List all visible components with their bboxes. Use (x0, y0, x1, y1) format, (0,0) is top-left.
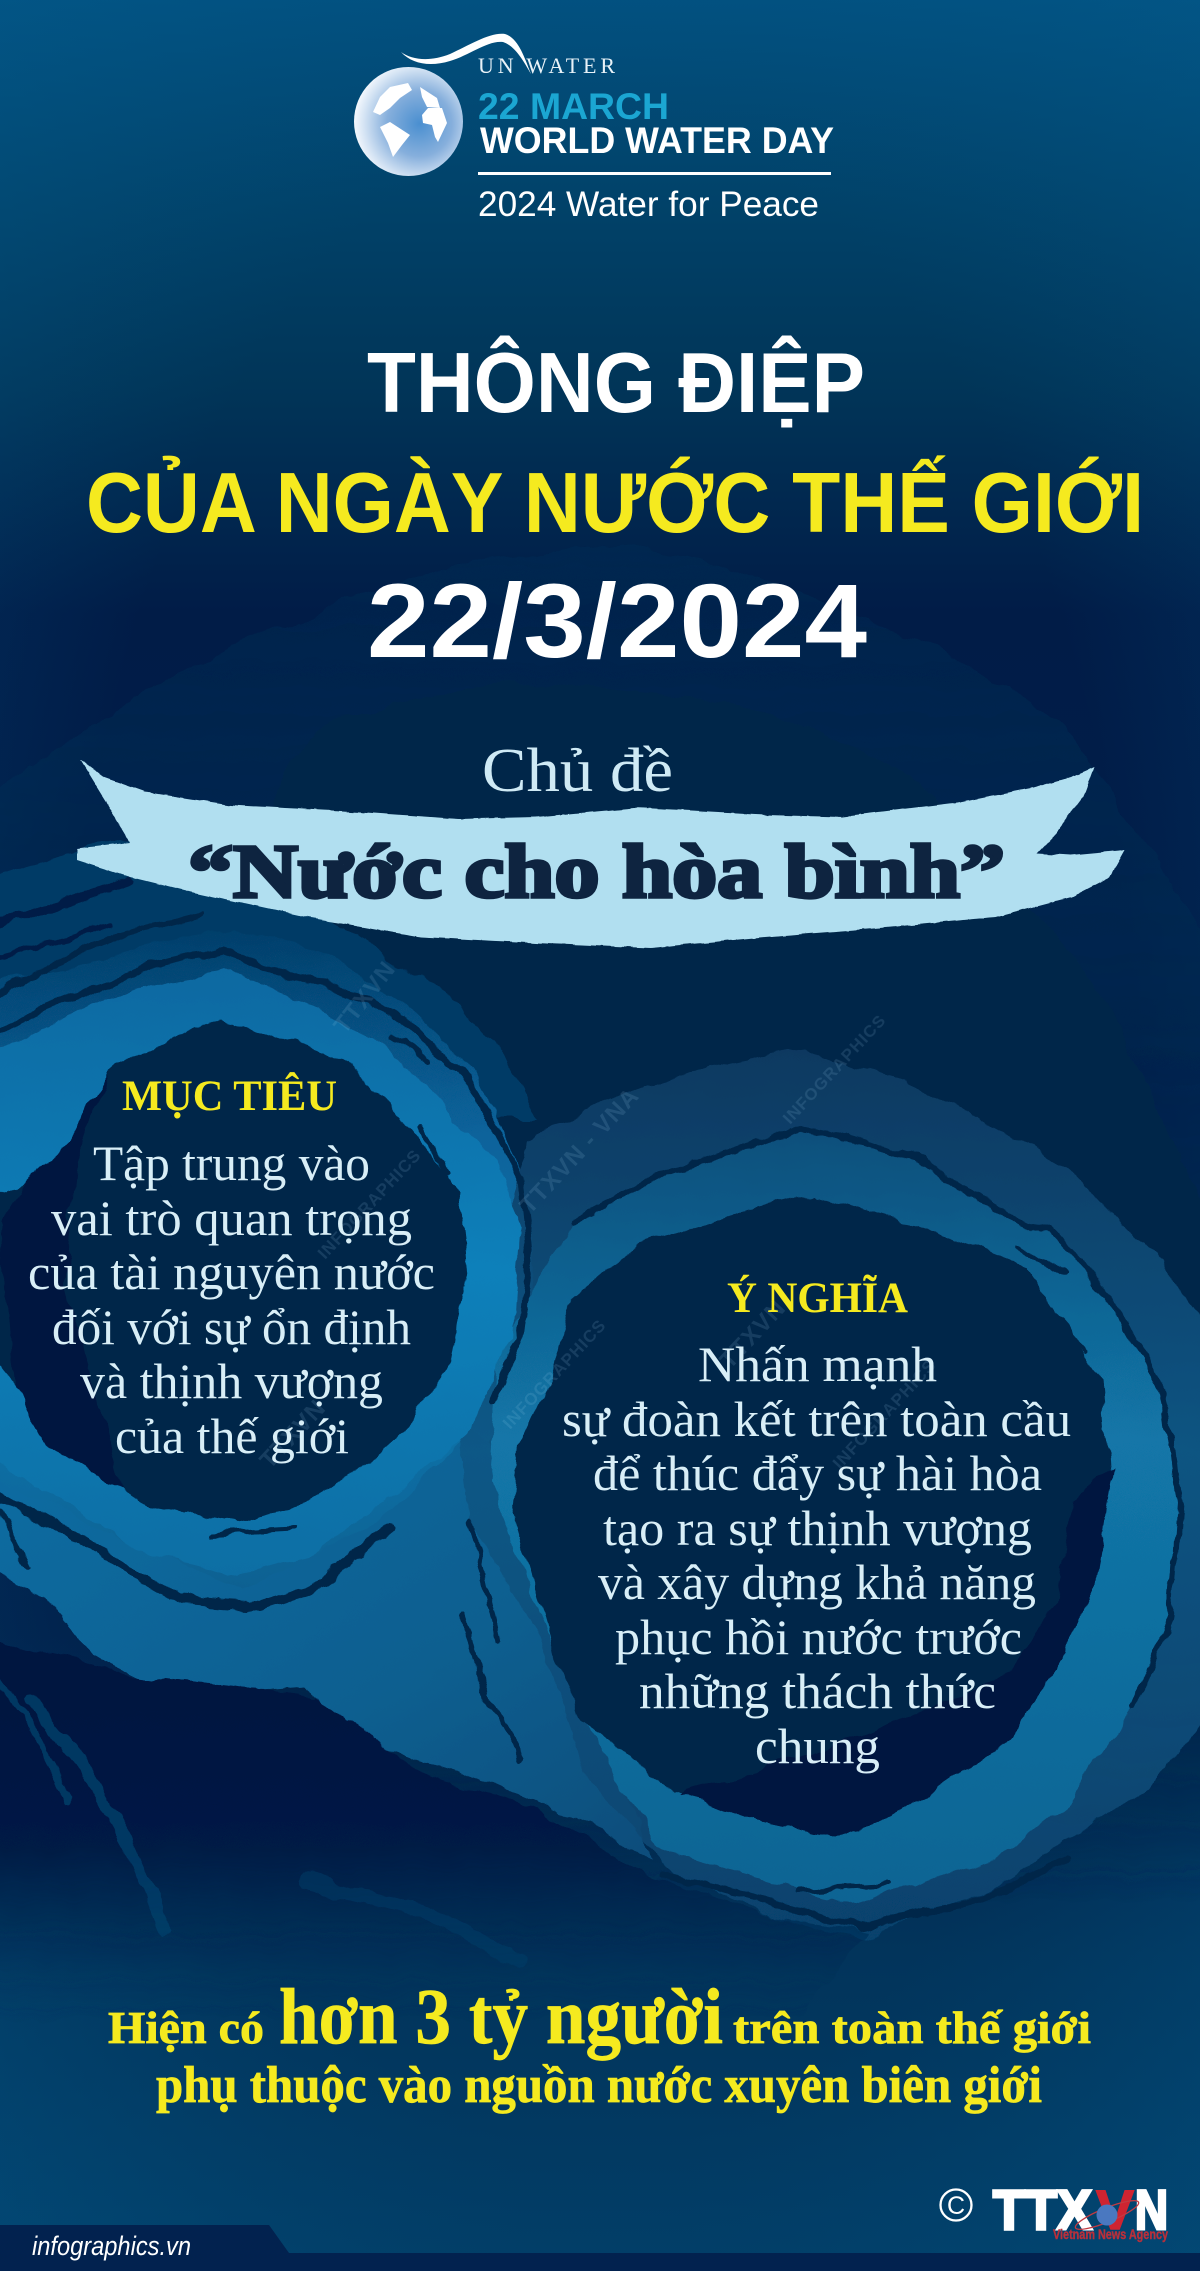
logo: TTXVN: Vietnam News Agency (1053, 2226, 1168, 2242)
title (86, 335, 1144, 680)
goal text: của thế giới (115, 1408, 349, 1464)
lower left ribbon (0, 1430, 650, 1860)
watermarks: TTXVN (715, 1294, 791, 1374)
callout: 3 billion people: Hiện có (108, 2002, 264, 2053)
right ring inner dark blob (513, 1195, 1110, 1838)
callout: 3 billion people: trên toàn thế giới (733, 2002, 1091, 2053)
footer band (0, 2225, 1200, 2271)
watermarks: TTXVN (328, 956, 401, 1039)
icon: copyright: C (947, 2192, 965, 2220)
panel: meaning (562, 1275, 1071, 1774)
meaning text: chung (755, 1718, 880, 1774)
right ring inner band (490, 1128, 1179, 1905)
logo: TTXVN: N (1135, 2178, 1168, 2241)
left ring inner band (0, 969, 520, 1575)
watermarks: INFOGRAPHICS (829, 1356, 940, 1473)
callout: 3 billion people: hơn 3 tỷ người (279, 1974, 723, 2061)
right blob darker crescent (681, 1467, 1113, 1838)
World Water Day: WORLD WATER DAY (480, 120, 834, 161)
logo: TTXVN: V (1096, 2178, 1134, 2241)
meaning text: tạo ra sự thịnh vượng (603, 1500, 1032, 1556)
callout: 3 billion people: phụ thuộc vào nguồn nước xuyên biên giới (156, 2057, 1042, 2114)
lower left teal stripes (0, 1670, 520, 1960)
deep shadow lower left (0, 1636, 865, 2020)
goal text (28, 1135, 435, 1464)
left ring inner dark blob (0, 1018, 467, 1522)
icon: copyright (940, 2190, 972, 2220)
logo: TTXVN: TTX (993, 2178, 1092, 2241)
meaning text: và xây dựng khả năng (598, 1554, 1036, 1610)
watermarks (255, 956, 940, 1474)
left blob darker crescent (0, 1074, 122, 1490)
meaning text: những thách thức (639, 1663, 996, 1719)
banner: theme (77, 760, 1125, 948)
meaning text: sự đoàn kết trên toàn cầu (562, 1391, 1071, 1447)
banner: theme: “Nước cho hòa bình” (188, 830, 1005, 914)
panel: goal (28, 1073, 435, 1464)
left top wave stripes (0, 880, 130, 960)
inner dome shape (200, 682, 1200, 1900)
heading: goal: MỤC TIÊU (122, 1073, 337, 1120)
UN Water label: UN WATER (478, 53, 615, 78)
goal text: của tài nguyên nước (28, 1244, 435, 1300)
icon: globe with swoosh (354, 34, 531, 176)
goal text: và thịnh vượng (80, 1353, 383, 1409)
meaning text: Nhấn mạnh (698, 1336, 937, 1392)
watermarks: TTXVN (255, 1394, 331, 1474)
outer dome shape (0, 545, 1200, 1500)
theme 2024: 2024 Water for Peace (478, 185, 819, 224)
title: THÔNG ĐIỆP (367, 335, 865, 431)
goal text: đối với sự ổn định (52, 1299, 411, 1355)
meaning text: để thúc đẩy sự hài hòa (593, 1445, 1042, 1501)
logo: TTXVN (993, 2178, 1168, 2242)
watermarks: TTXVN - VNA (515, 1082, 645, 1219)
watermarks: INFOGRAPHICS (499, 1316, 610, 1433)
meaning text: phục hồi nước trước (615, 1609, 1022, 1665)
title: 22/3/2024 (367, 563, 867, 680)
left waves under banner (0, 840, 536, 1130)
dark ink lines (0, 915, 1179, 1927)
22 March: 22 MARCH (478, 86, 669, 127)
heading: meaning: Ý NGHĨA (727, 1275, 908, 1322)
left ring outer band (0, 930, 536, 1610)
title: CỦA NGÀY NƯỚC THẾ GIỚI (86, 455, 1144, 551)
water ink rings artwork (0, 545, 1200, 2020)
watermarks: INFOGRAPHICS (314, 1146, 425, 1263)
goal text: Tập trung vào (93, 1135, 370, 1191)
right ring outer band (455, 1050, 1200, 1940)
callout: 3 billion people (108, 1974, 1091, 2114)
theme label: Chủ đề (482, 737, 673, 805)
goal text: vai trò quan trọng (51, 1190, 412, 1246)
source: infographics.vn: infographics.vn (32, 2231, 191, 2261)
meaning text (562, 1336, 1071, 1774)
logo: World Water Day (354, 34, 834, 224)
watermarks: INFOGRAPHICS (779, 1011, 890, 1128)
